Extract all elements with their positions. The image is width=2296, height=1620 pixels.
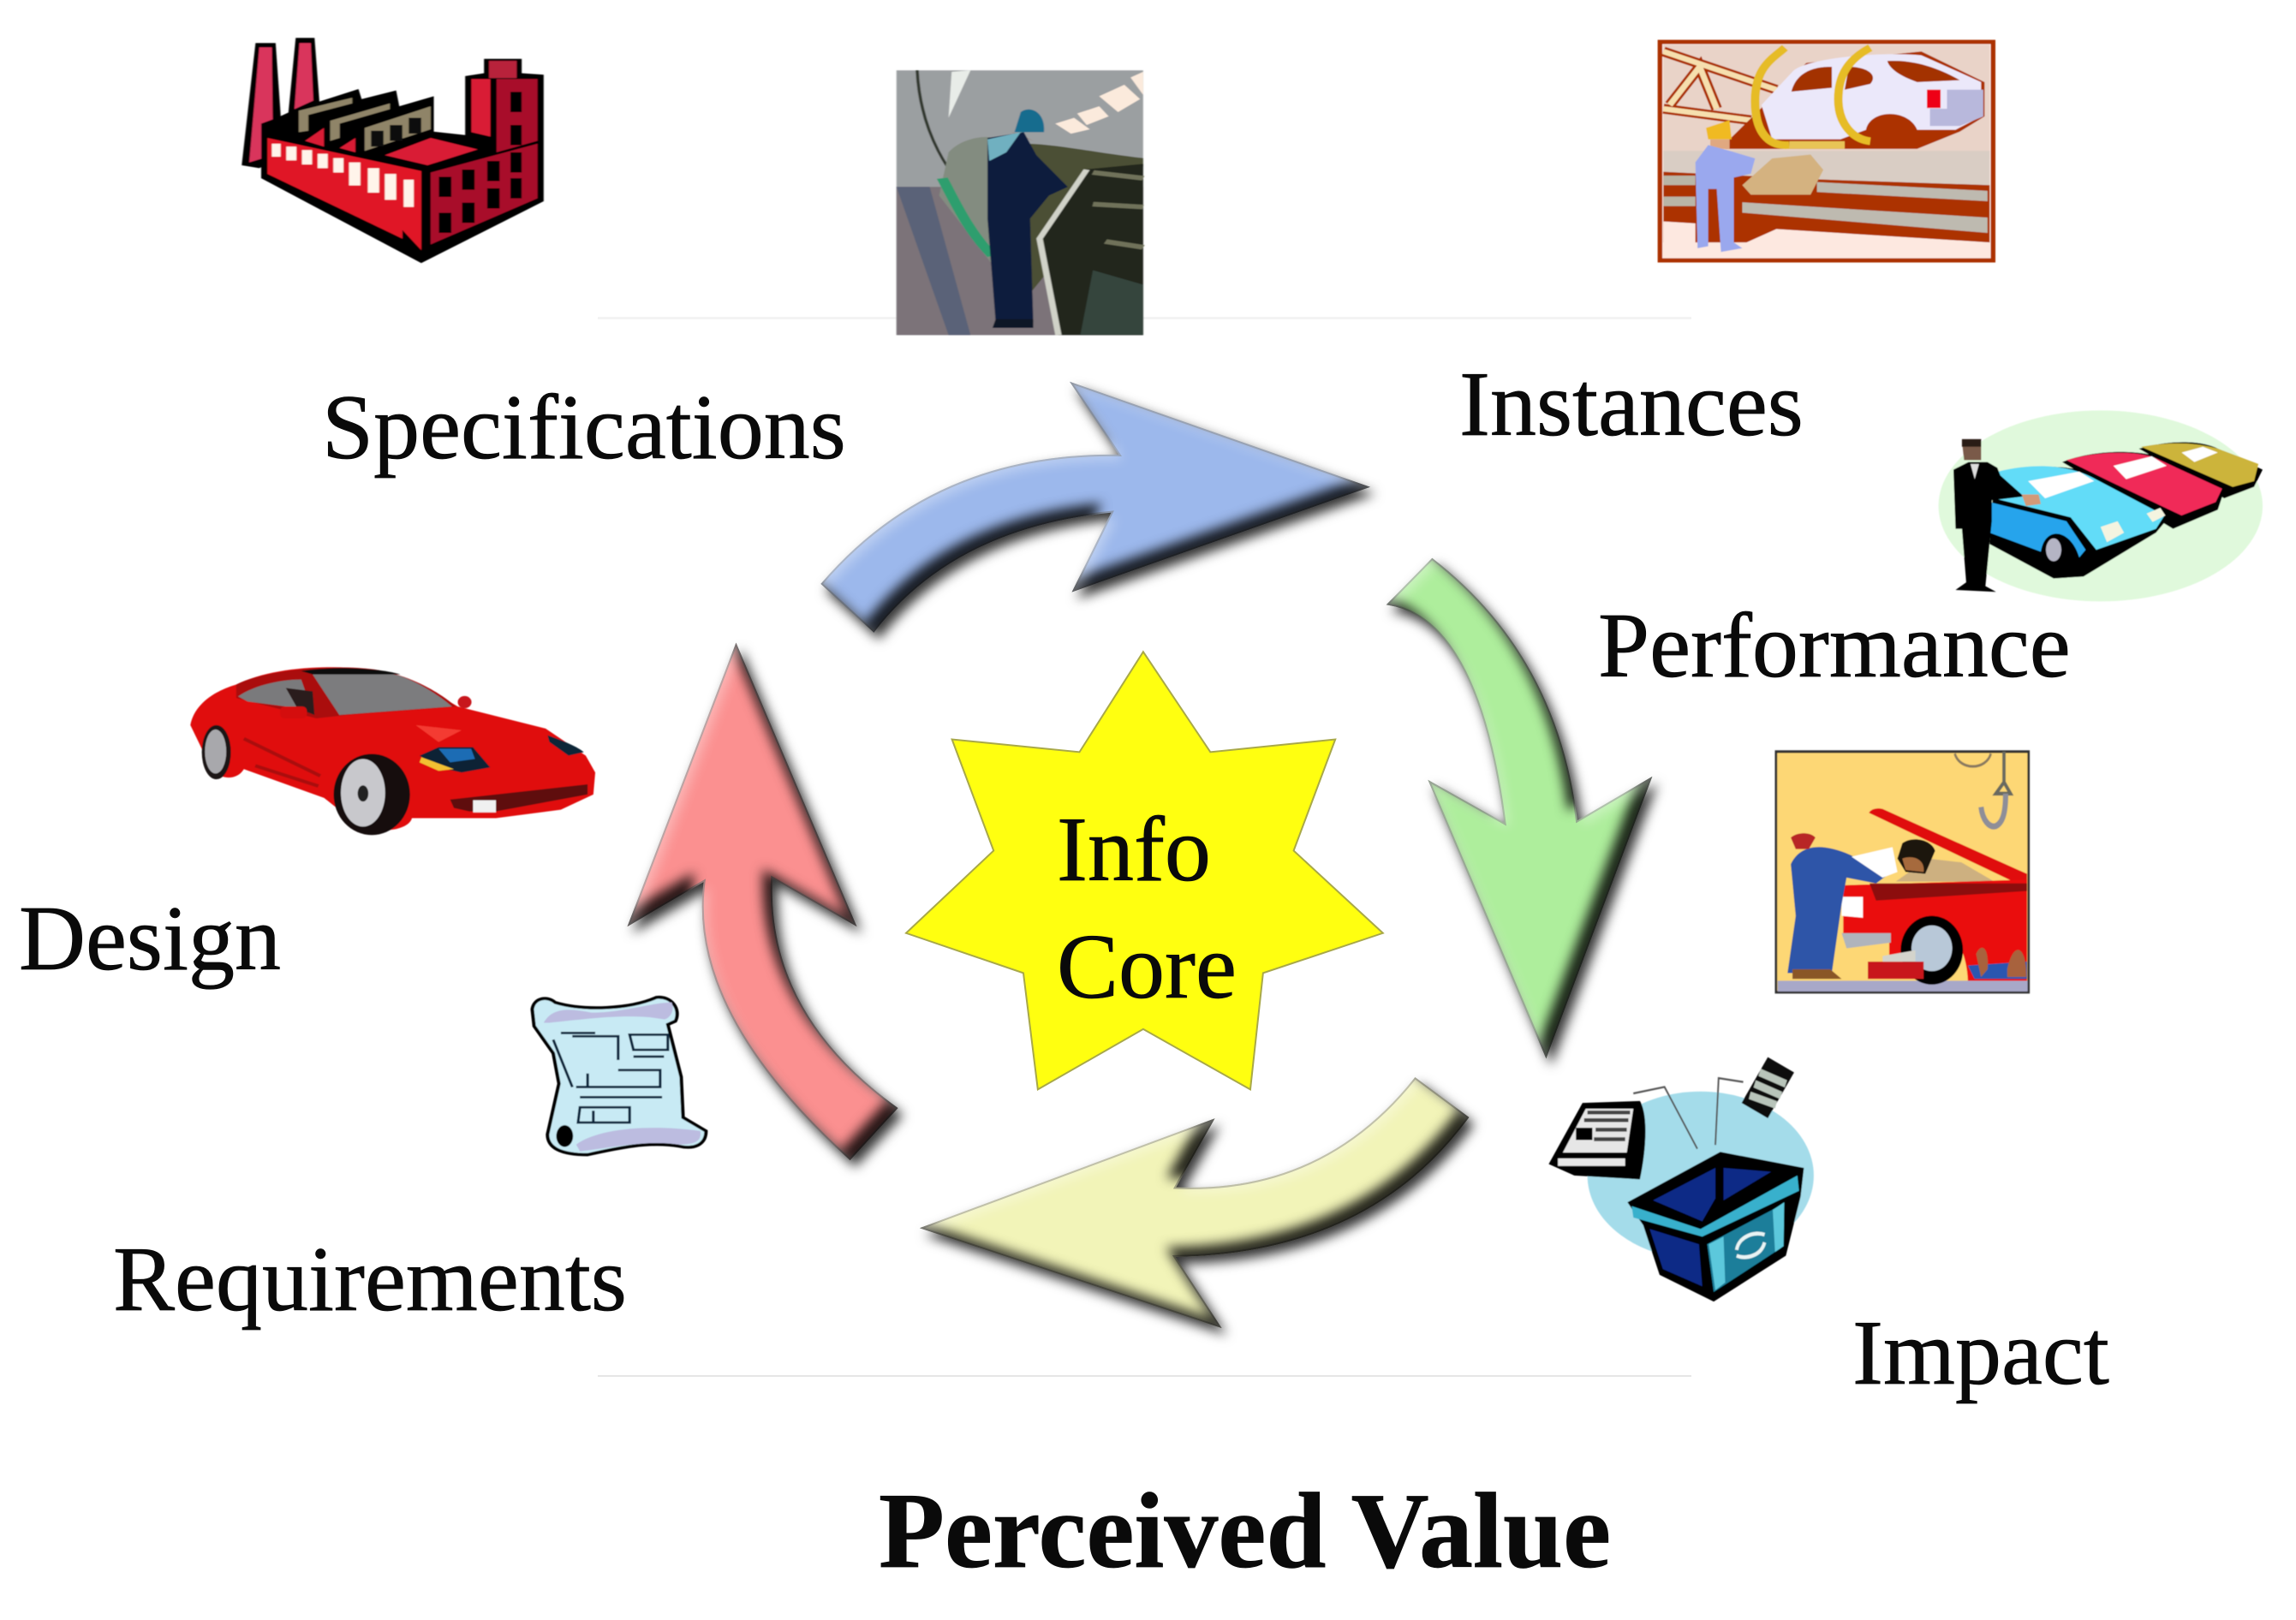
- arrow: yellow, impact to requirements: [922, 1078, 1468, 1326]
- label: instances: Instances: [1459, 354, 1804, 456]
- label: impact: Impact: [1852, 1302, 2109, 1404]
- label: core: Core: [1057, 916, 1237, 1018]
- label: requirements: Requirements: [113, 1229, 627, 1331]
- icon: worker at car photo: [897, 70, 1143, 335]
- arrow: red, requirements to specifications: [629, 645, 897, 1159]
- icon: salesman and cars: [1939, 410, 2263, 601]
- icon: car assembly line: [1660, 42, 1993, 260]
- label: design: Design: [19, 888, 281, 990]
- icon: factory: [242, 38, 544, 263]
- icon: recycling bin: [1548, 1057, 1814, 1301]
- icon: red sports car: [190, 667, 595, 835]
- label: specifications: Specifications: [322, 377, 846, 479]
- title: perceived value: Perceived Value: [879, 1472, 1611, 1591]
- icon: blueprint scroll: [532, 998, 706, 1155]
- arrow: green, instances to performance: [1388, 559, 1650, 1057]
- label: performance: Performance: [1598, 595, 2071, 697]
- star: info core: [906, 652, 1383, 1089]
- arrow: blue, specifications to instances: [822, 384, 1368, 631]
- label: info: Info: [1057, 799, 1211, 901]
- icon: mechanic at car: [1776, 752, 2029, 992]
